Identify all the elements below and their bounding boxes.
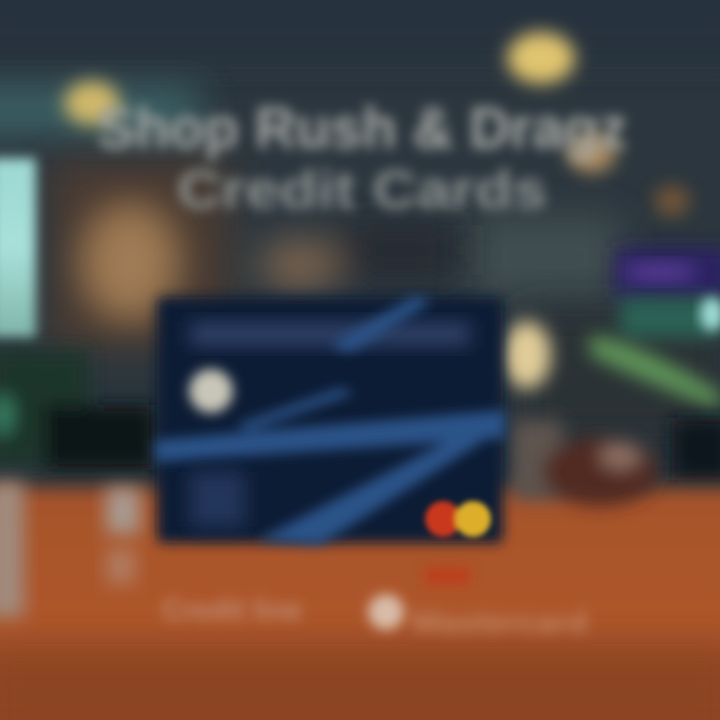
card body <box>157 297 503 543</box>
window <box>0 158 36 338</box>
card header text <box>190 322 470 346</box>
table text: Mastercard <box>412 606 588 639</box>
plants left <box>0 350 155 470</box>
right colourful screen and foliage <box>590 248 720 480</box>
glass and items on right of table <box>512 420 658 506</box>
title: Shop Rush & Dragz <box>97 96 627 161</box>
credit card <box>155 296 505 545</box>
blurred brown room on left <box>50 160 460 350</box>
title <box>97 96 627 220</box>
title: Credit Cards <box>177 160 547 220</box>
lights <box>64 32 690 389</box>
card logo <box>425 501 491 537</box>
table text <box>162 568 588 639</box>
card blue stripes <box>155 296 505 545</box>
card chip <box>189 369 233 413</box>
table <box>0 482 720 720</box>
card number shadow <box>190 472 245 527</box>
table text: Credit line <box>162 594 302 627</box>
